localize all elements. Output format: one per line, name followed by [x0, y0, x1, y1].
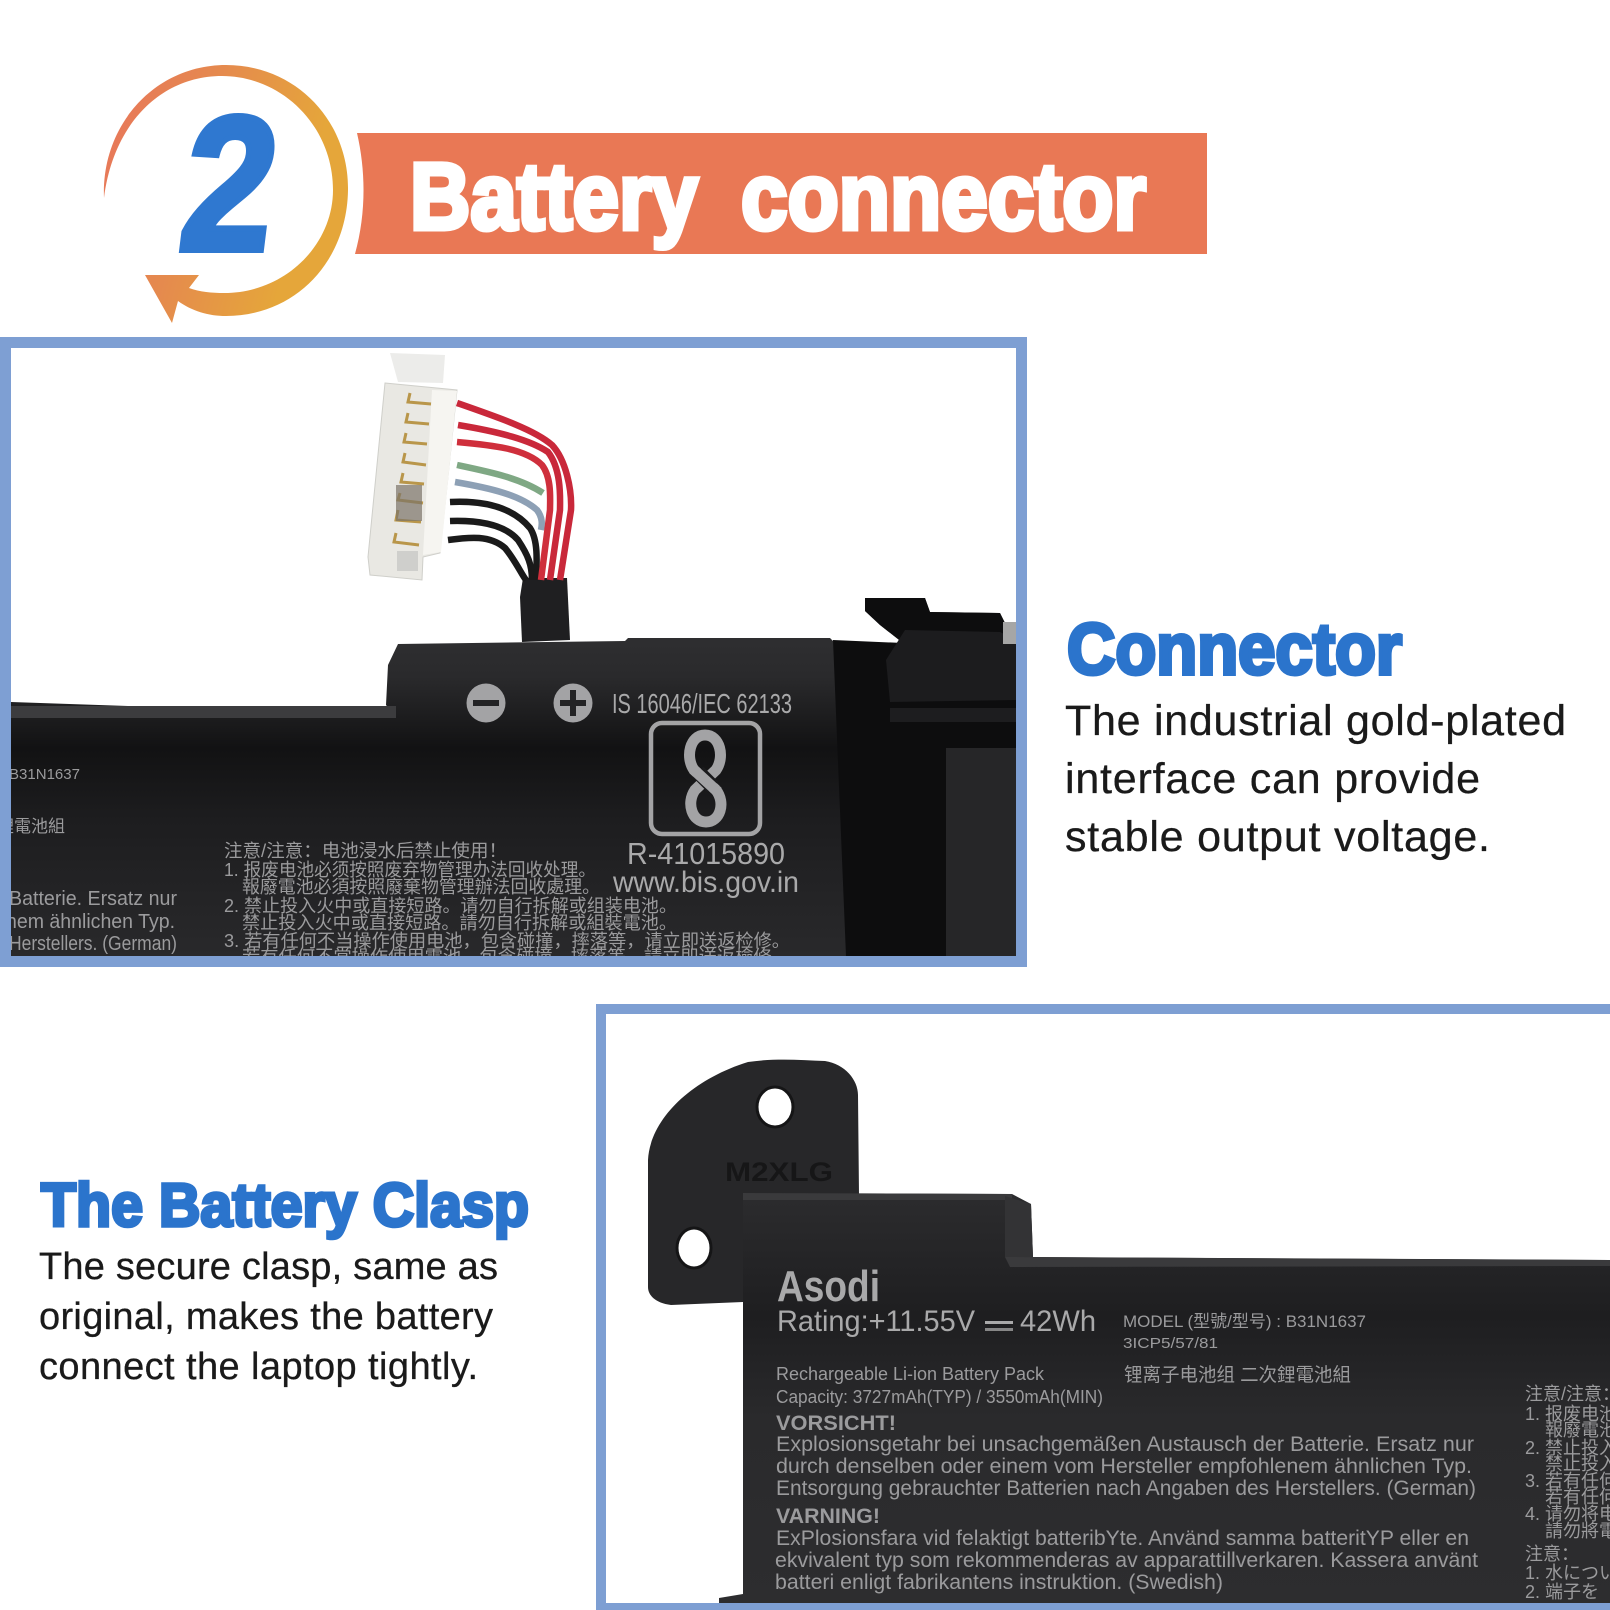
- text block: connector description: stable output voltage.: [1065, 813, 1490, 861]
- model info: Capacity: 3727mAh(TYP) / 3550mAh(MIN): [776, 1387, 1103, 1407]
- label text: Chinese safety notes: 注意/注意：电池浸水后禁止使用！: [224, 841, 507, 861]
- warning text: German: durch denselben oder einem vom Hersteller empfohlenem ähnlichen Typ.: [776, 1455, 1472, 1478]
- numeral 2: 2: [171, 77, 289, 291]
- heading: Connector: Connector: [1067, 610, 1402, 690]
- label text: Asian-language notes: [1525, 1384, 1610, 1602]
- battery body: [719, 1193, 1610, 1603]
- warning text: Swedish: [775, 1505, 1478, 1594]
- label text: Asian-language notes: 注意：: [1525, 1544, 1579, 1564]
- label text: German warning fragments: [6, 888, 177, 955]
- wires: [448, 403, 571, 580]
- battery clasp: [648, 1060, 859, 1305]
- heading: Battery connector banner: Battery: [410, 144, 698, 250]
- warning text: Swedish: batteri enligt fabrikantens instruktion. (Swedish): [775, 1571, 1223, 1594]
- warning text: German: Entsorgung gebrauchter Batterien nach Angaben des Herstellers. (German): [776, 1477, 1476, 1500]
- model info: MODEL (型號/型号) : B31N1637: [1123, 1312, 1366, 1331]
- warning text: Swedish: ExPlosionsfara vid felaktigt batteribYte. Använd samma batteritYP eller en: [776, 1527, 1469, 1550]
- text block: clasp description: The secure clasp, same as: [39, 1246, 498, 1288]
- clasp moulding mark: M2XLG: [725, 1157, 833, 1187]
- label text: German warning fragments: Herstellers. (German): [9, 933, 177, 955]
- heading: The Battery Clasp: The Battery Clasp: [41, 1171, 529, 1239]
- model info: 3ICP5/57/81: [1123, 1335, 1218, 1352]
- label text: Chinese safety notes: 1. 报废电池必须按照废弃物管理办法回收处理。: [224, 860, 596, 880]
- warning text: Swedish: ekvivalent typ som rekommenderas av apparattillverkaren. Kassera använt: [775, 1549, 1478, 1572]
- label text: Chinese safety notes: 若有任何不當操作使用電池，包含碰撞，摔落等，請立即送返檢修。: [242, 947, 790, 967]
- rating: 42Wh: [1020, 1305, 1096, 1338]
- text block: connector description: [1065, 697, 1566, 861]
- warning text: Swedish: VARNING!: [776, 1505, 880, 1528]
- text block: clasp description: [39, 1246, 498, 1388]
- website: www.bis.gov.in: [612, 866, 799, 899]
- connector plug: [368, 353, 457, 580]
- text block: connector description: interface can provide: [1065, 755, 1480, 803]
- label text: Chinese safety notes: 報廢電池必須按照廢棄物管理辦法回收處理。: [242, 877, 600, 897]
- wire sleeve: [520, 578, 570, 642]
- label text: Chinese safety notes: 禁止投入火中或直接短路。請勿自行拆解或組裝電池。: [242, 913, 677, 933]
- polarity symbols: [466, 684, 592, 722]
- model info: [776, 1312, 1366, 1407]
- model info: Rechargeable Li-ion Battery Pack: [776, 1364, 1045, 1384]
- certification text: IS 16046/IEC 62133: [612, 688, 792, 719]
- label text: German warning fragments: Batterie. Ersatz nur: [9, 888, 177, 910]
- label text: Chinese safety notes: 3. 若有任何不当操作使用电池，包含碰撞，摔落等，请立即送返检修。: [224, 931, 790, 951]
- rating: [779, 1310, 1094, 1337]
- icon: BIS mark: [651, 723, 760, 834]
- circular arrow: [104, 65, 348, 323]
- battery body top: [11, 598, 1016, 956]
- registration number: R-41015890: [627, 836, 785, 871]
- model info: 锂离子电池组 二次鋰電池組: [1124, 1364, 1351, 1386]
- rating: Rating:+11.55V: [777, 1305, 975, 1338]
- heading: Battery connector banner: [355, 133, 1207, 254]
- panel: clasp photo: [596, 1004, 1610, 1610]
- label text: model: B31N1637: [9, 766, 80, 783]
- panel: connector photo: [0, 337, 1027, 967]
- brand logo: Asodi: [777, 1262, 880, 1311]
- icon: step number 2 with circular arrow: [104, 65, 348, 323]
- label text: Chinese safety notes: 2. 禁止投入火中或直接短路。请勿自行拆解或组装电池。: [224, 896, 677, 916]
- warning text: German: VORSICHT!: [776, 1412, 896, 1435]
- text block: connector description: The industrial gold-plated: [1065, 697, 1566, 745]
- text block: clasp description: original, makes the battery: [39, 1296, 493, 1338]
- warning text: German: Explosionsgetahr bei unsachgemäßen Austausch der Batterie. Ersatz nur: [776, 1433, 1474, 1456]
- label text: Chinese safety notes: [224, 841, 778, 956]
- warning text: German: [776, 1412, 1476, 1500]
- text block: clasp description: connect the laptop tightly.: [39, 1346, 478, 1388]
- heading: Battery connector banner: connector: [741, 144, 1146, 250]
- label text: German warning fragments: nem ähnlichen Typ.: [6, 911, 175, 933]
- label text: Asian-language notes: 2. 端子を: [1525, 1582, 1599, 1602]
